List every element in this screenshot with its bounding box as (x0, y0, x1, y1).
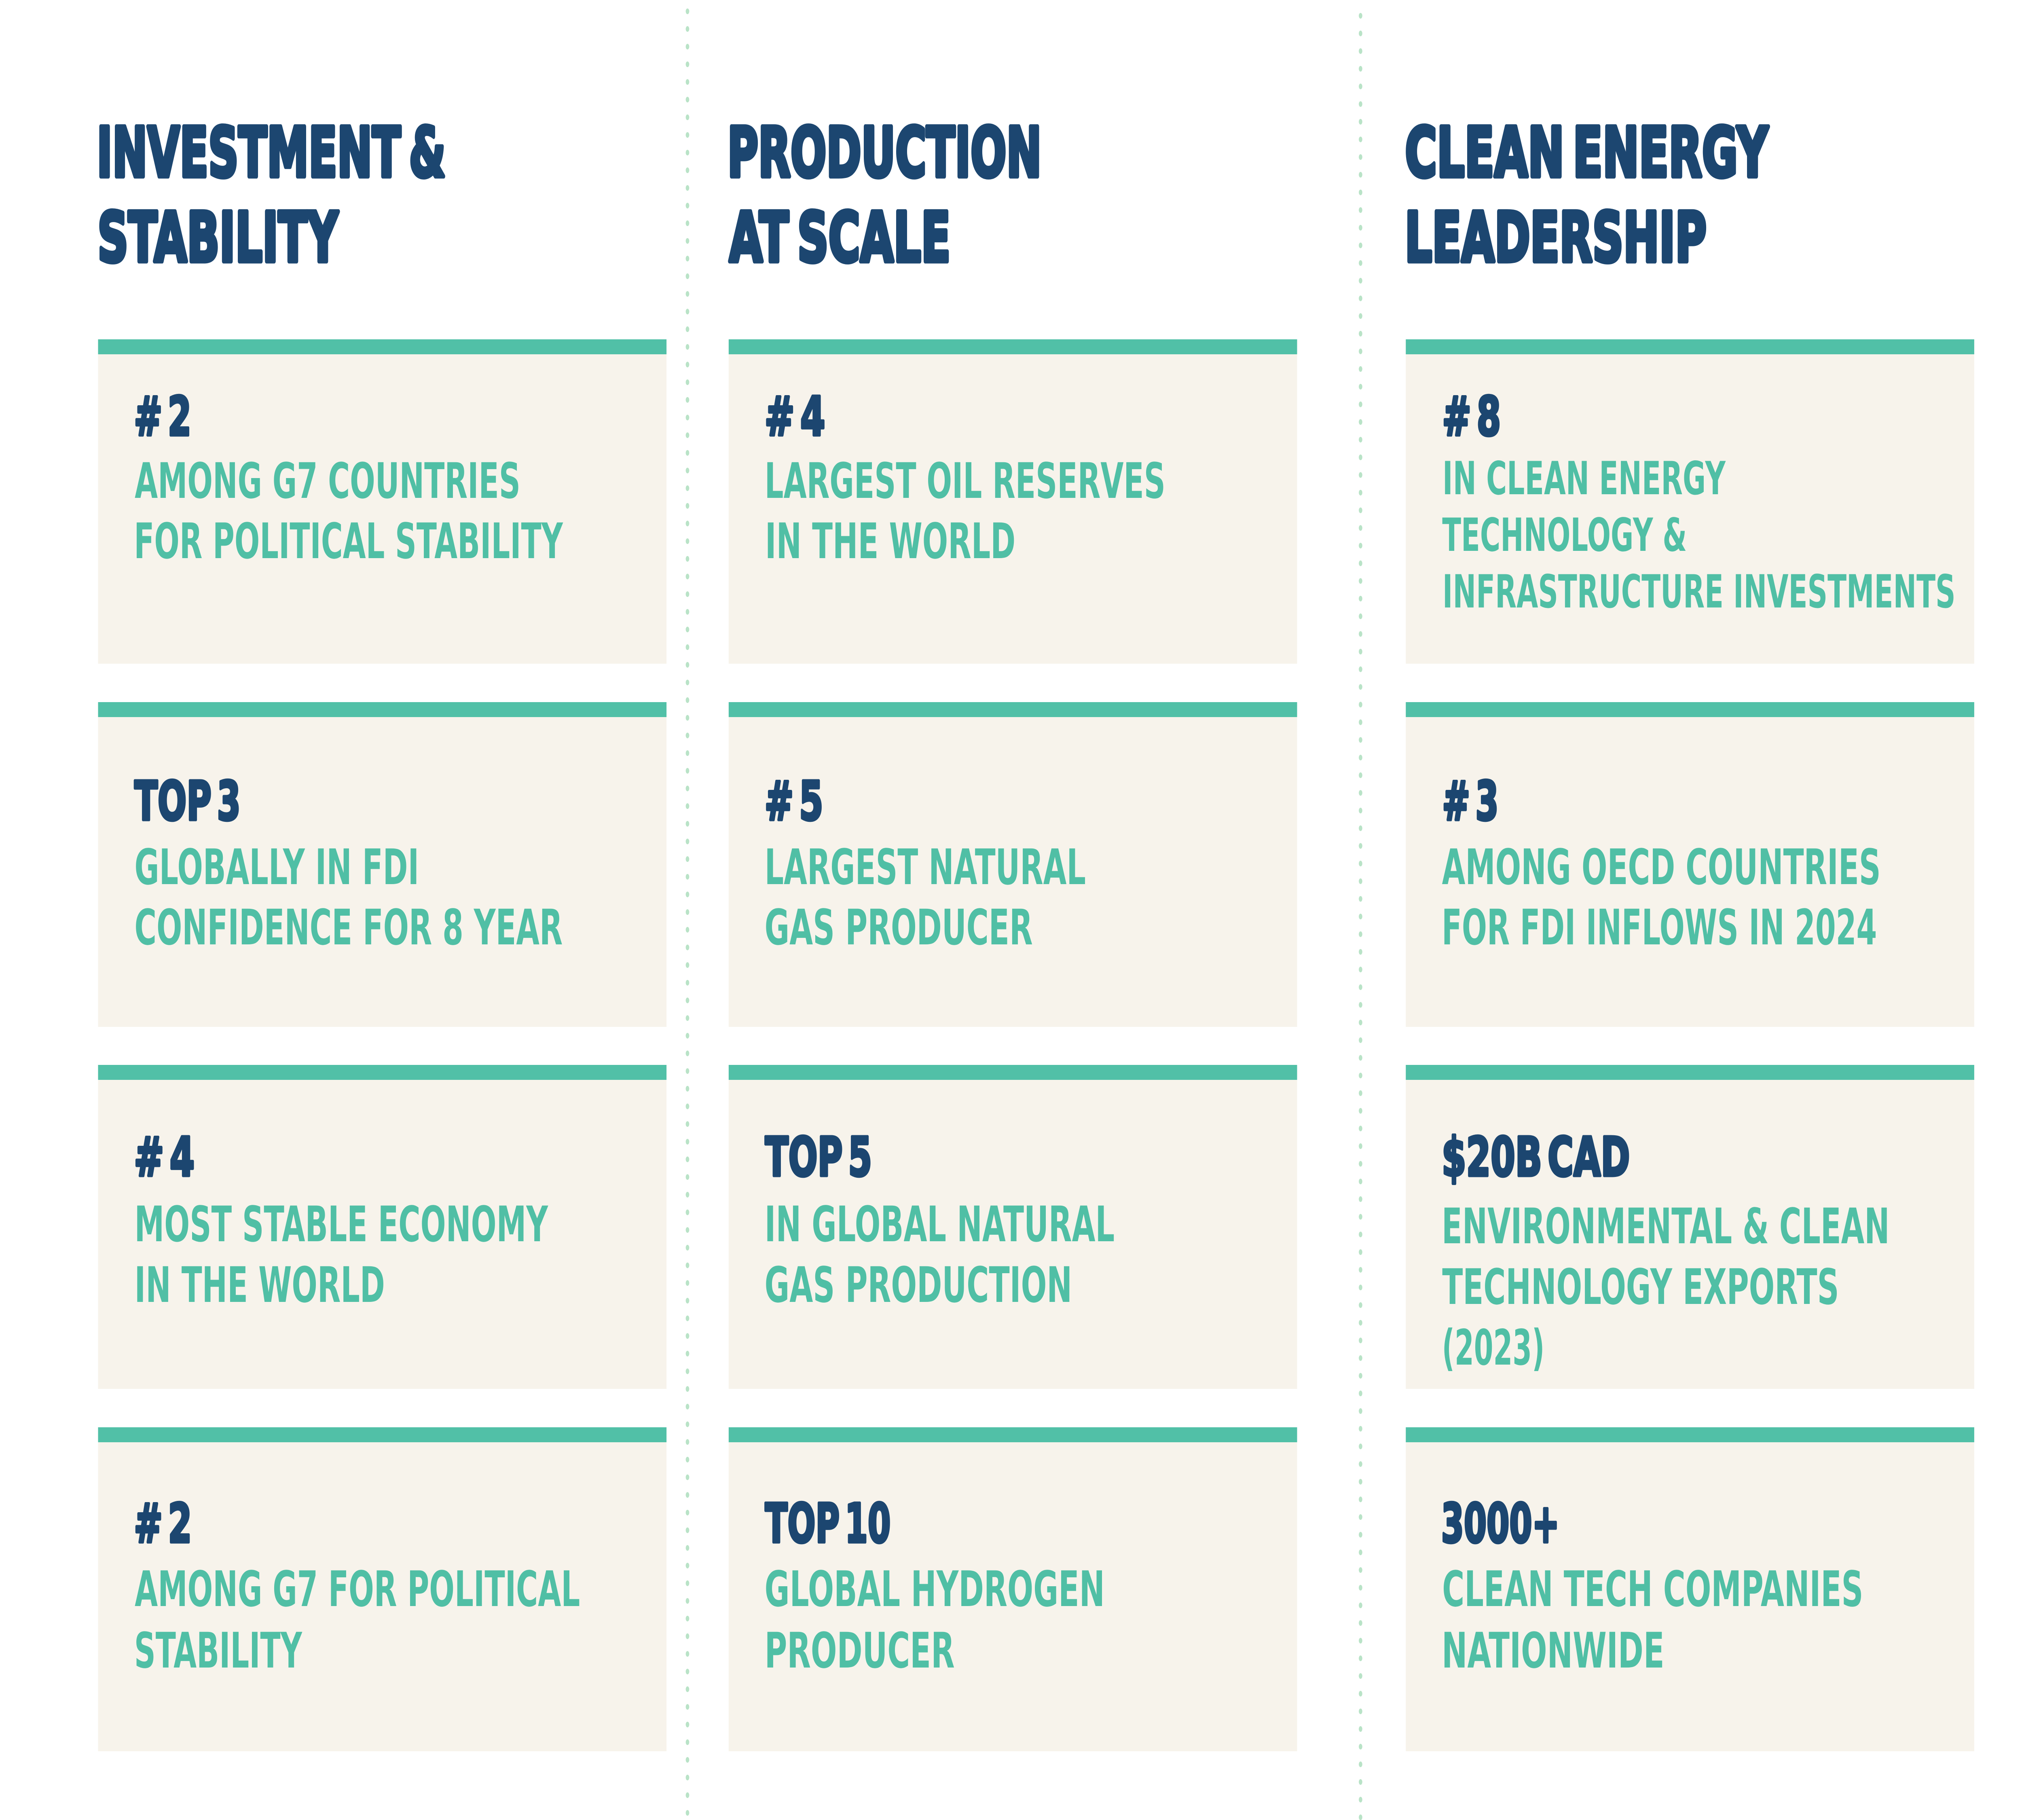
card: #8 clean energy investments: TECHNOLOGY & (1442, 508, 1687, 562)
card: #2 among G7 countries: # 2 (134, 386, 191, 448)
card: #8 clean energy investments (1406, 339, 1974, 664)
card: top 3 FDI confidence (98, 702, 666, 1027)
card: $20B CAD clean technology exports: $20B CAD (1442, 1126, 1630, 1189)
panel: production at scale (728, 113, 1297, 1751)
heading: production at scale: AT SCALE (729, 198, 951, 277)
card: #2 among G7 for political stability (98, 1427, 666, 1751)
card: top 5 natural gas production: GAS PRODUCTION (765, 1257, 1072, 1314)
card: $20B CAD clean technology exports: TECHNOLOGY EXPORTS (1442, 1259, 1839, 1316)
panel: investment and stability (97, 113, 666, 1751)
heading: clean energy leadership (1405, 113, 1769, 277)
card: #8 clean energy investments: IN CLEAN ENERGY (1442, 452, 1726, 505)
card: #3 OECD FDI inflows: # 3 (1442, 770, 1499, 833)
card: #8 clean energy investments: INFRASTRUCTURE INVESTMENTS (1442, 565, 1956, 618)
card: 3000+ clean tech companies: 3000+ (1441, 1493, 1559, 1555)
card: top 10 hydrogen producer: GLOBAL HYDROGEN (765, 1561, 1105, 1618)
card: $20B CAD clean technology exports: ENVIRONMENTAL & CLEAN (1442, 1198, 1889, 1255)
card: #4 most stable economy: # 4 (134, 1126, 195, 1189)
card: #2 among G7 countries: AMONG G7 COUNTRIES (135, 453, 520, 510)
card: #2 among G7 for political stability: AMONG G7 FOR POLITICAL (135, 1561, 580, 1618)
card: #3 OECD FDI inflows: FOR FDI INFLOWS IN 2024 (1442, 899, 1877, 956)
card: #5 largest natural gas producer: # 5 (765, 770, 823, 833)
card: #3 OECD FDI inflows (1406, 702, 1974, 1027)
card: #5 largest natural gas producer: LARGEST NATURAL (765, 839, 1086, 896)
card: #4 most stable economy: MOST STABLE ECONOMY (134, 1196, 548, 1253)
card: #2 among G7 for political stability: # 2 (134, 1493, 192, 1555)
card: #4 largest oil reserves: IN THE WORLD (765, 513, 1015, 570)
card: #5 largest natural gas producer (729, 702, 1297, 1027)
card: top 3 FDI confidence: CONFIDENCE FOR 8 YEAR (134, 899, 563, 956)
card: $20B CAD clean technology exports: (2023) (1442, 1319, 1544, 1376)
card: top 5 natural gas production (729, 1065, 1297, 1389)
card: #2 among G7 countries (98, 339, 666, 664)
card: #4 largest oil reserves: LARGEST OIL RESERVES (765, 453, 1165, 510)
card: top 10 hydrogen producer: PRODUCER (765, 1622, 955, 1679)
panel: clean energy leadership (1405, 113, 1974, 1751)
card: $20B CAD clean technology exports (1406, 1065, 1974, 1389)
card: #4 largest oil reserves (729, 339, 1297, 664)
heading: investment and stability (97, 113, 446, 277)
card: #3 OECD FDI inflows: AMONG OECD COUNTRIES (1442, 839, 1881, 896)
heading: clean energy leadership: CLEAN ENERGY (1405, 113, 1769, 193)
card: #4 most stable economy (98, 1065, 666, 1389)
heading: production at scale: PRODUCTION (728, 113, 1042, 193)
card: 3000+ clean tech companies: NATIONWIDE (1442, 1622, 1665, 1679)
card: #2 among G7 countries: FOR POLITICAL STABILITY (134, 513, 563, 570)
card: 3000+ clean tech companies: CLEAN TECH COMPANIES (1442, 1561, 1863, 1618)
card: #5 largest natural gas producer: GAS PRODUCER (765, 899, 1033, 956)
card: 3000+ clean tech companies (1406, 1427, 1974, 1751)
heading: investment and stability: STABILITY (97, 198, 339, 277)
card: top 10 hydrogen producer (729, 1427, 1297, 1751)
card: #4 largest oil reserves: # 4 (765, 386, 825, 448)
card: #2 among G7 for political stability: STABILITY (134, 1622, 302, 1679)
card: top 5 natural gas production: TOP 5 (765, 1126, 872, 1189)
heading: production at scale (728, 113, 1042, 277)
card: top 5 natural gas production: IN GLOBAL NATURAL (765, 1196, 1115, 1253)
heading: clean energy leadership: LEADERSHIP (1405, 198, 1707, 277)
card: #8 clean energy investments: # 8 (1442, 386, 1501, 448)
card: #4 most stable economy: IN THE WORLD (134, 1257, 385, 1314)
card: top 3 FDI confidence: TOP 3 (134, 770, 241, 833)
card: top 10 hydrogen producer: TOP 10 (765, 1493, 890, 1555)
card: top 3 FDI confidence: GLOBALLY IN FDI (134, 839, 419, 896)
heading: investment and stability: INVESTMENT & (97, 113, 446, 193)
